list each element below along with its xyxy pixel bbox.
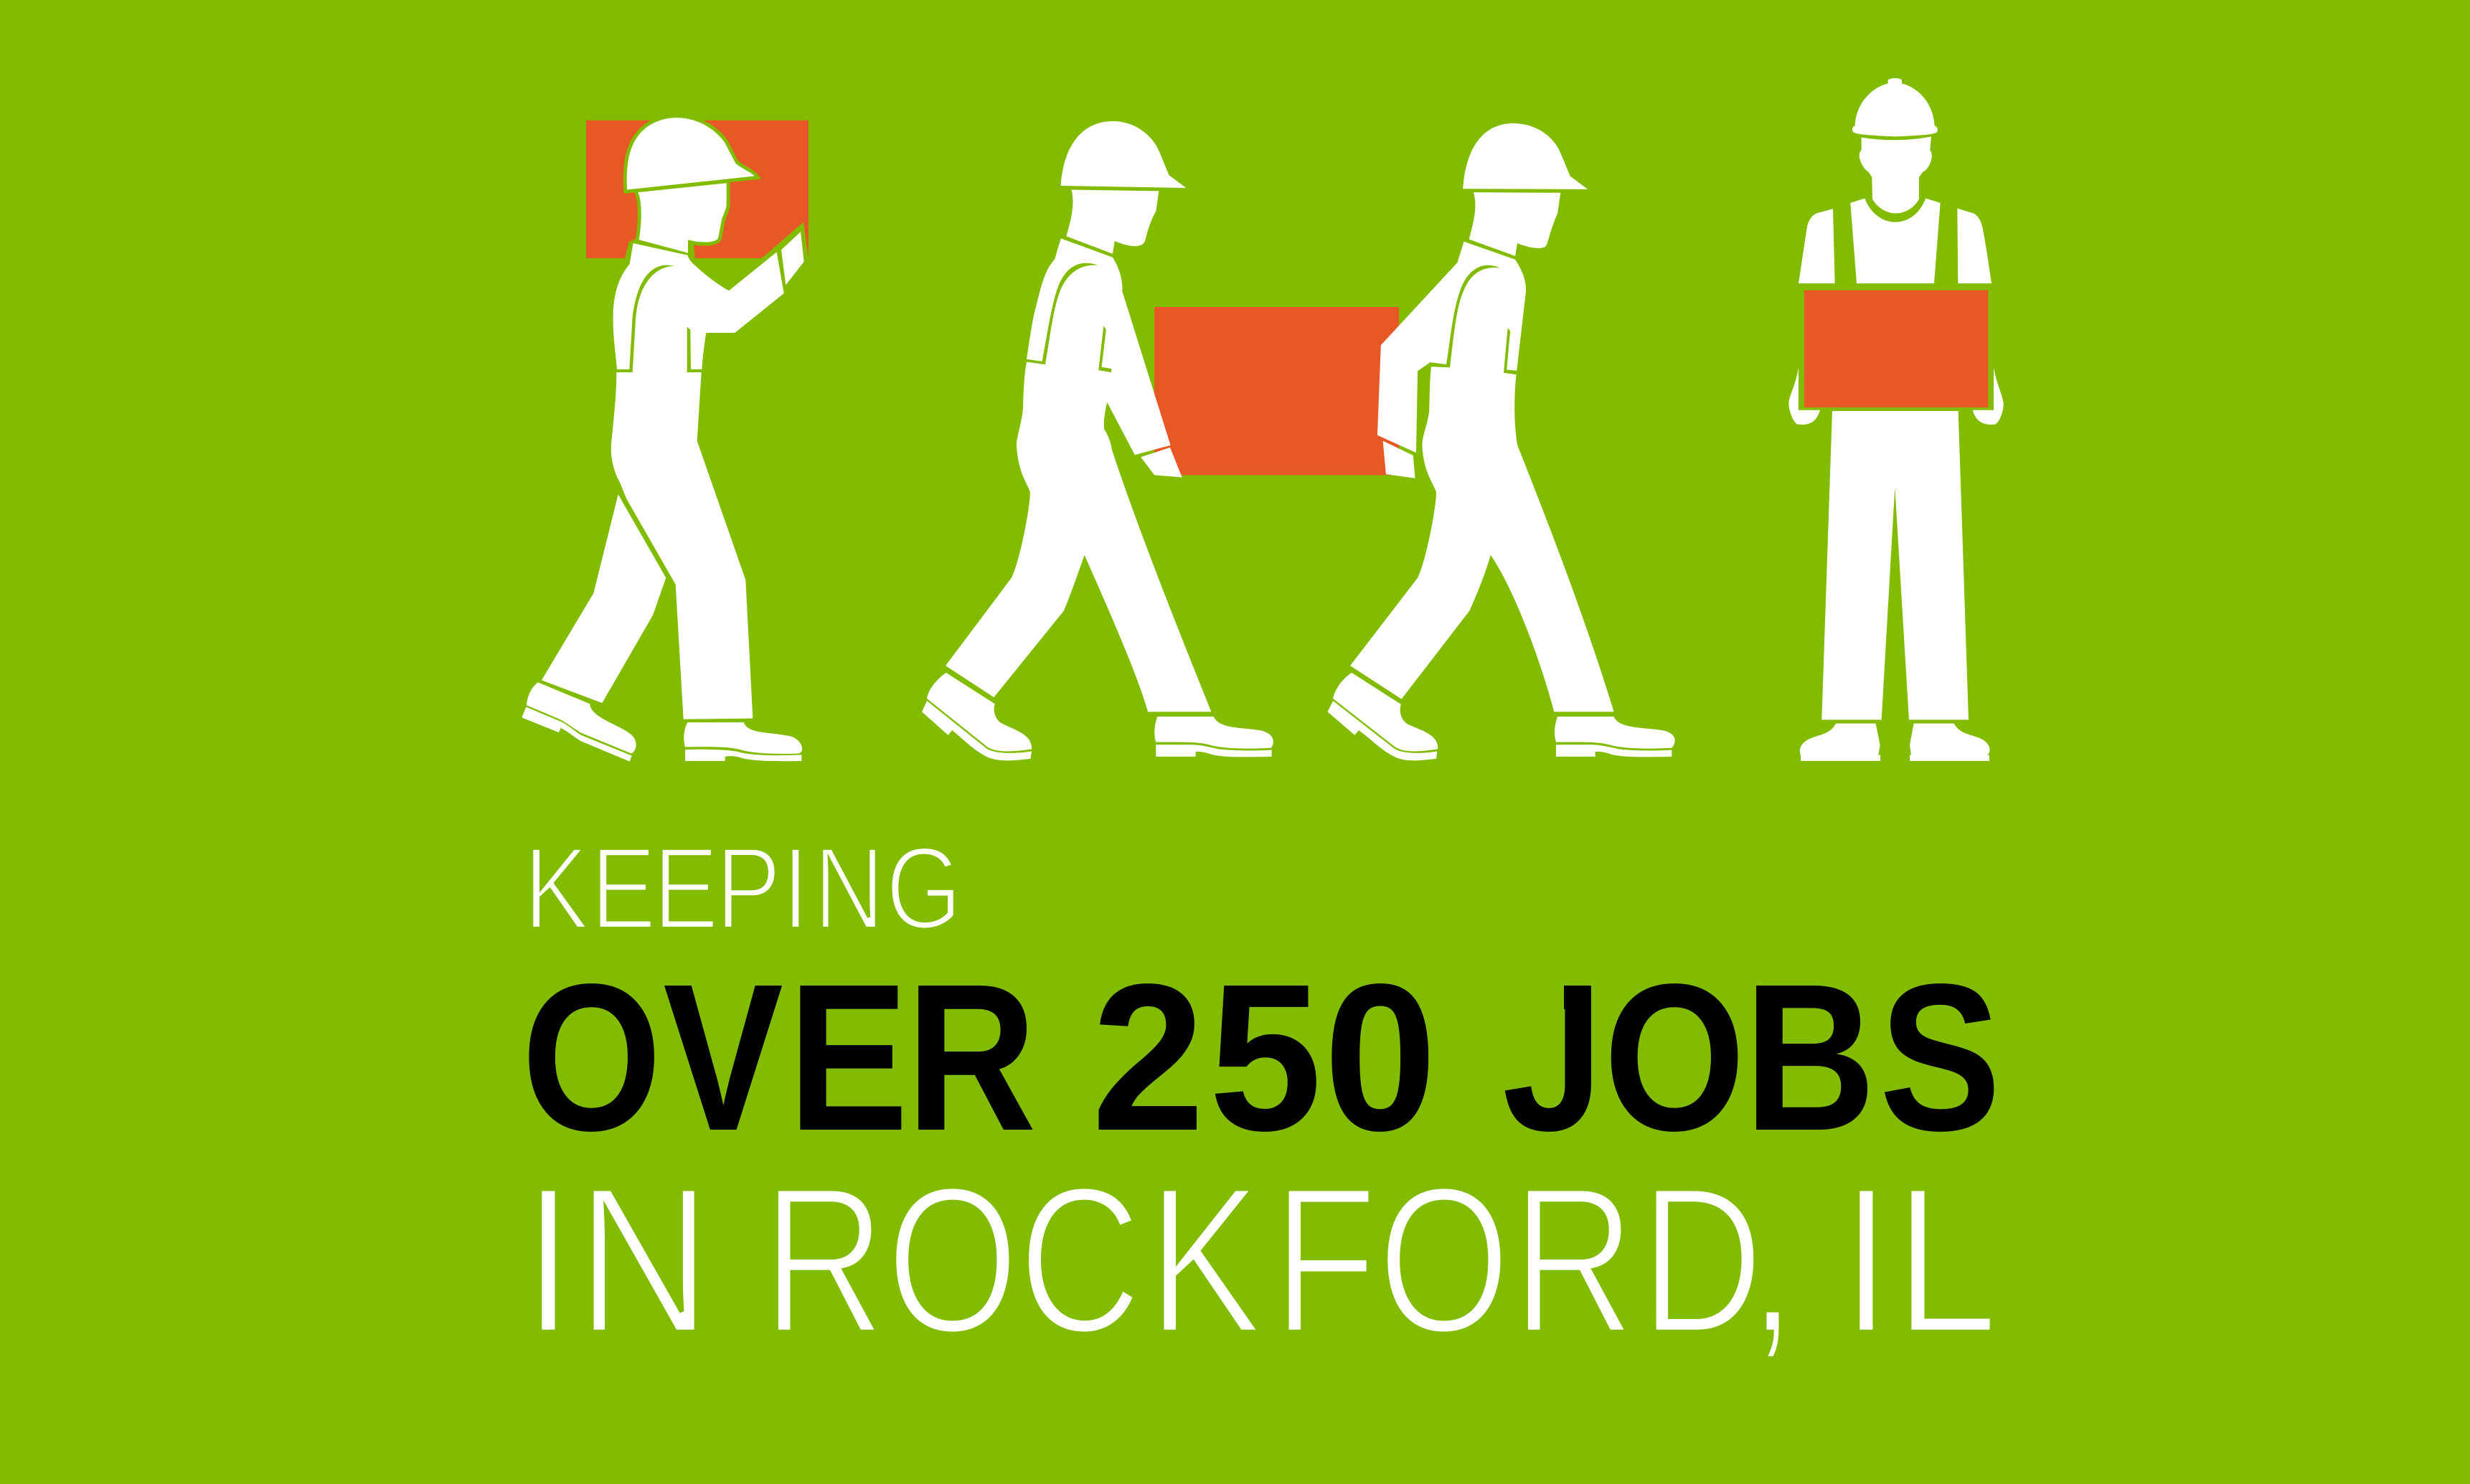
- helmet: [1463, 123, 1588, 189]
- left shoe: [1800, 724, 1880, 761]
- hand: [781, 232, 804, 285]
- left hand: [1788, 367, 1820, 425]
- body, arm and legs: [946, 238, 1211, 712]
- back shoe: [522, 682, 636, 762]
- body, arm and legs: [1350, 242, 1614, 712]
- head and neck: [1859, 136, 1932, 213]
- torso: [1850, 198, 1941, 283]
- word: IL: IL: [1840, 1143, 1998, 1376]
- left worker: [922, 121, 1273, 760]
- word: IN: IN: [522, 1143, 712, 1376]
- orange box behind the head: [586, 120, 809, 258]
- heading line: KEEPING: KEEPING: [524, 822, 962, 954]
- right worker: [1327, 123, 1675, 760]
- back shoe: [922, 673, 1032, 760]
- body with raised arm and front leg: [611, 243, 784, 719]
- front shoe: [684, 722, 802, 761]
- right shoe: [1910, 724, 1990, 761]
- helmet: [1852, 78, 1938, 136]
- heading line: OVER 250 JOBS: [522, 940, 2001, 1174]
- heading line: IN ROCKFORD, IL: [522, 1143, 1998, 1376]
- front shoe: [1555, 717, 1675, 757]
- orange box: [1804, 290, 1988, 407]
- head and neck: [1469, 192, 1560, 256]
- green halo over box: [625, 222, 809, 270]
- hand: [1383, 441, 1415, 478]
- hand: [1141, 448, 1182, 477]
- helmet: [1061, 121, 1186, 188]
- arm slit: [1098, 326, 1112, 372]
- figure: two workers carrying a box: [922, 121, 1675, 760]
- number: 250: 250: [1092, 940, 1437, 1174]
- head and neck: [1066, 189, 1159, 254]
- right shoulder: [1957, 208, 1991, 283]
- word: JOBS: JOBS: [1502, 940, 2001, 1174]
- left shoulder: [1799, 209, 1835, 283]
- front shoe: [1154, 717, 1273, 757]
- figure: front-facing worker holding a box: [1788, 78, 2004, 761]
- word: ROCKFORD,: ROCKFORD,: [762, 1143, 1796, 1376]
- figure: worker carrying box on shoulder: [522, 118, 809, 762]
- orange shared box: [1154, 307, 1399, 475]
- word: OVER: OVER: [522, 940, 1037, 1174]
- legs: [1821, 411, 1969, 720]
- right hand: [1973, 367, 2004, 425]
- back leg: [542, 494, 666, 703]
- back shoe: [1327, 673, 1438, 760]
- helmet: [627, 118, 755, 189]
- head and neck: [638, 183, 727, 253]
